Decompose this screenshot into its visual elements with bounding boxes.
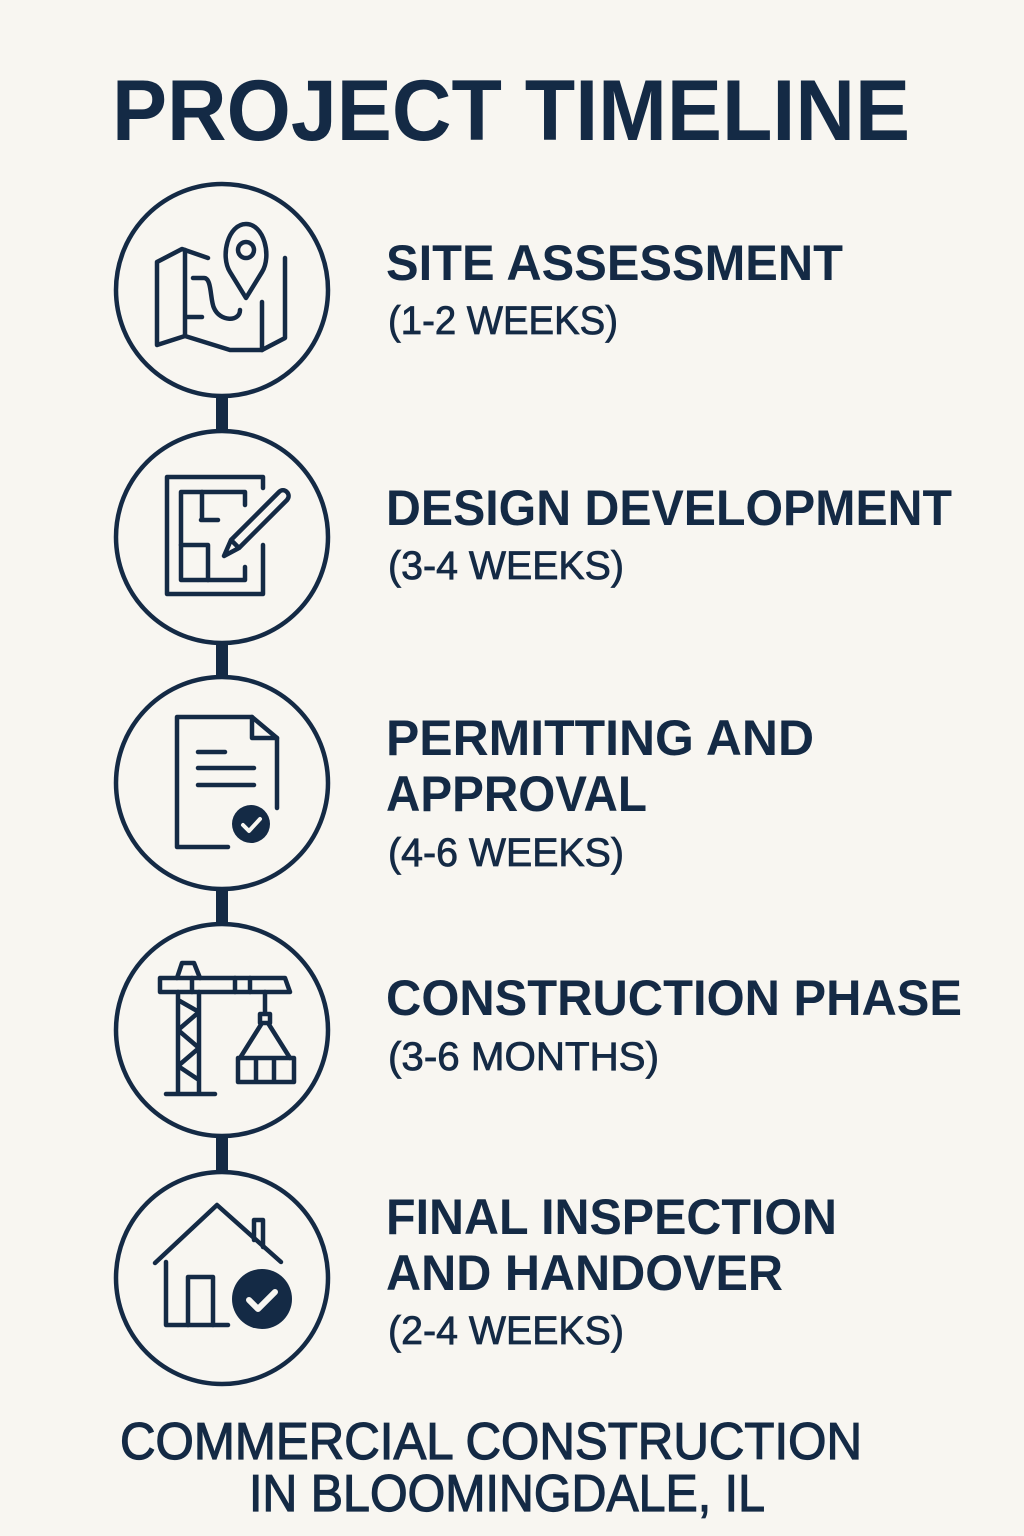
heading: FINAL INSPECTION	[386, 1189, 837, 1245]
icon: house with check	[116, 1172, 328, 1384]
step 1: site assessment	[116, 184, 843, 396]
heading: DESIGN DEVELOPMENT	[386, 480, 952, 536]
icon: crane	[116, 924, 328, 1136]
step 5: final inspection: AND HANDOVER	[386, 1245, 783, 1301]
step 5: final inspection	[116, 1172, 837, 1384]
footer: COMMERCIAL CONSTRUCTION	[120, 1413, 862, 1471]
icon: blueprint and pencil	[116, 431, 328, 643]
duration: (3-6 MONTHS)	[388, 1035, 659, 1079]
step 3: permitting	[116, 677, 814, 889]
icon badge: check	[232, 1269, 292, 1329]
duration: (4-6 WEEKS)	[388, 831, 624, 875]
step 2: design development	[116, 431, 952, 643]
heading: SITE ASSESSMENT	[386, 235, 843, 291]
heading: CONSTRUCTION PHASE	[386, 970, 962, 1026]
title: PROJECT TIMELINE	[112, 63, 910, 159]
duration: (2-4 WEEKS)	[388, 1309, 624, 1353]
step 3: permitting: APPROVAL	[386, 766, 647, 822]
icon: document with check	[116, 677, 328, 889]
duration: (1-2 WEEKS)	[388, 299, 618, 343]
icon: map with pin	[116, 184, 328, 396]
footer: IN BLOOMINGDALE, IL	[249, 1465, 765, 1523]
timeline connectors	[216, 395, 228, 1175]
duration: (3-4 WEEKS)	[388, 544, 624, 588]
footer	[120, 1413, 862, 1523]
heading: PERMITTING AND	[386, 710, 814, 766]
step 4: construction	[116, 924, 962, 1136]
icon badge: check	[232, 805, 270, 843]
